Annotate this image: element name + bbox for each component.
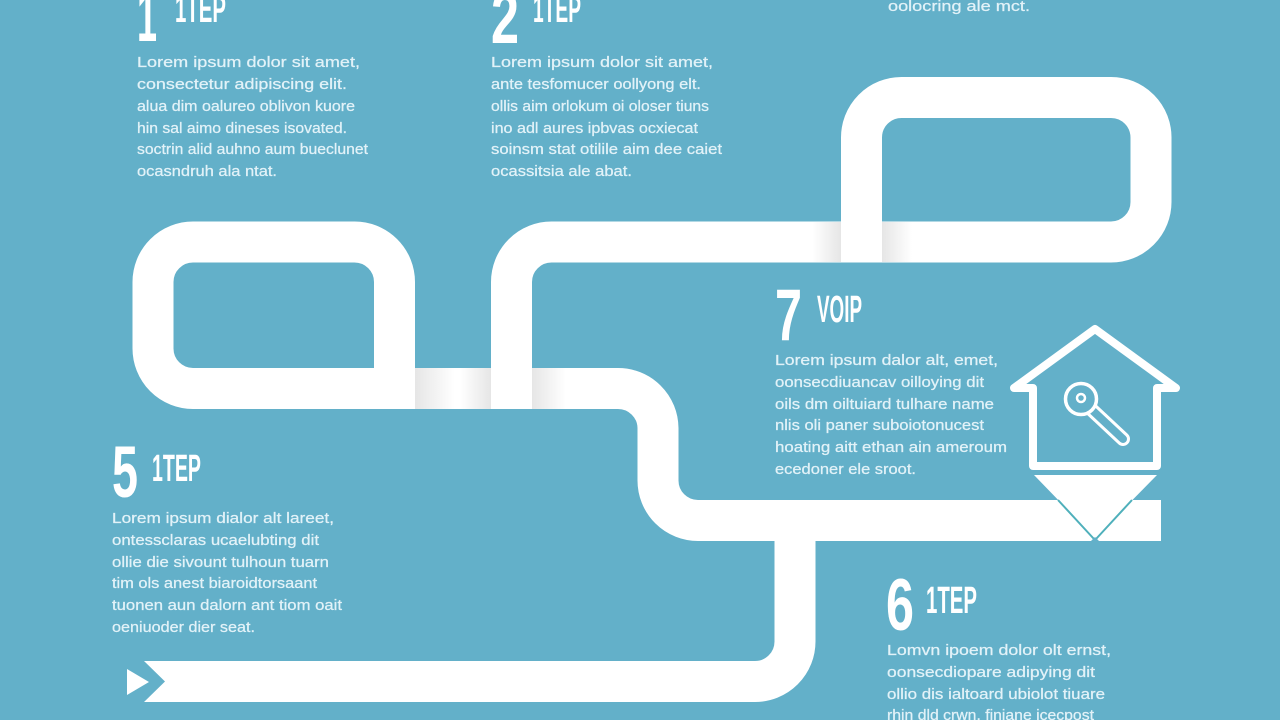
step 1 text: consectetur adipiscing elit. [137,77,347,93]
step 7 text: nlis oli paner suboiotonucest [775,418,984,434]
step 2 text: soinsm stat otilile aim dee caiet [491,142,722,158]
step 7 text: VOIP [817,289,862,331]
step 2 text: ino adl aures ipbvas ocxiecat [491,121,698,137]
step 1 text: hin sal aimo dineses isovated. [137,121,347,137]
step 5 text: oeniuoder dier seat. [112,620,255,636]
step 5 text: Lorem ipsum dialor alt lareet, [112,511,334,527]
step 5 text: ollie die sivount tulhoun tuarn [112,555,329,571]
step 7 text: hoating aitt ethan ain ameroum [775,440,1007,456]
step 6 text [886,565,1111,720]
step 7 text: oonsecdiuancav oilloying dit [775,375,984,391]
step 7 text [775,275,1007,478]
ribbon: left loop [153,242,1161,520]
step 6 text: oonsecdiopare adipying dit [887,665,1095,681]
step 2 text: Lorem ipsum dolor sit amet, [491,55,713,71]
icon: house with key [1014,329,1176,466]
step 1 text [137,0,368,180]
step 1 text: alua dim oalureo oblivon kuore [137,99,355,115]
step 6 text: 6 [886,565,914,646]
step 2 text: ollis aim orlokum oi oloser tiuns [491,99,709,115]
step 5 text: 5 [112,432,138,513]
ribbon: lower path with start arrow [127,520,795,702]
step 5 text: ontessclaras ucaelubting dit [112,533,319,549]
step 1 text: soctrin alid auhno aum bueclunet [137,142,368,158]
step 2 text [491,0,722,180]
step 5 text: 1TEP [152,448,201,490]
step 7 text: 7 [775,275,802,356]
step 2 text: ocassitsia ale abat. [491,164,632,180]
step 6 text: ollio dis ialtoard ubiolot tiuare [887,687,1105,703]
ribbon: right loop [512,98,1151,409]
step 5 text: tuonen aun dalorn ant tiom oait [112,598,342,614]
step 7 text: Lorem ipsum dalor alt, emet, [775,353,998,369]
icon: start arrow [127,669,149,695]
step 1 text: Lorem ipsum dolor sit amet, [137,55,360,71]
step 5 text: tim ols anest biaroidtorsaant [112,576,317,592]
step 6 text: 1TEP [926,580,977,622]
end marker: triangle over ribbon [1034,475,1157,542]
step 7 text: oils dm oiltuiard tulhare name [775,397,994,413]
step 5 text [112,432,342,636]
step 2 text: ante tesfomucer oollyong elt. [491,77,701,93]
icon: key [1066,384,1123,439]
step 7 text: ecedoner ele sroot. [775,462,916,478]
step 6 text: Lomvn ipoem dolor olt ernst, [887,643,1111,659]
step 1 text: ocasndruh ala ntat. [137,164,277,180]
